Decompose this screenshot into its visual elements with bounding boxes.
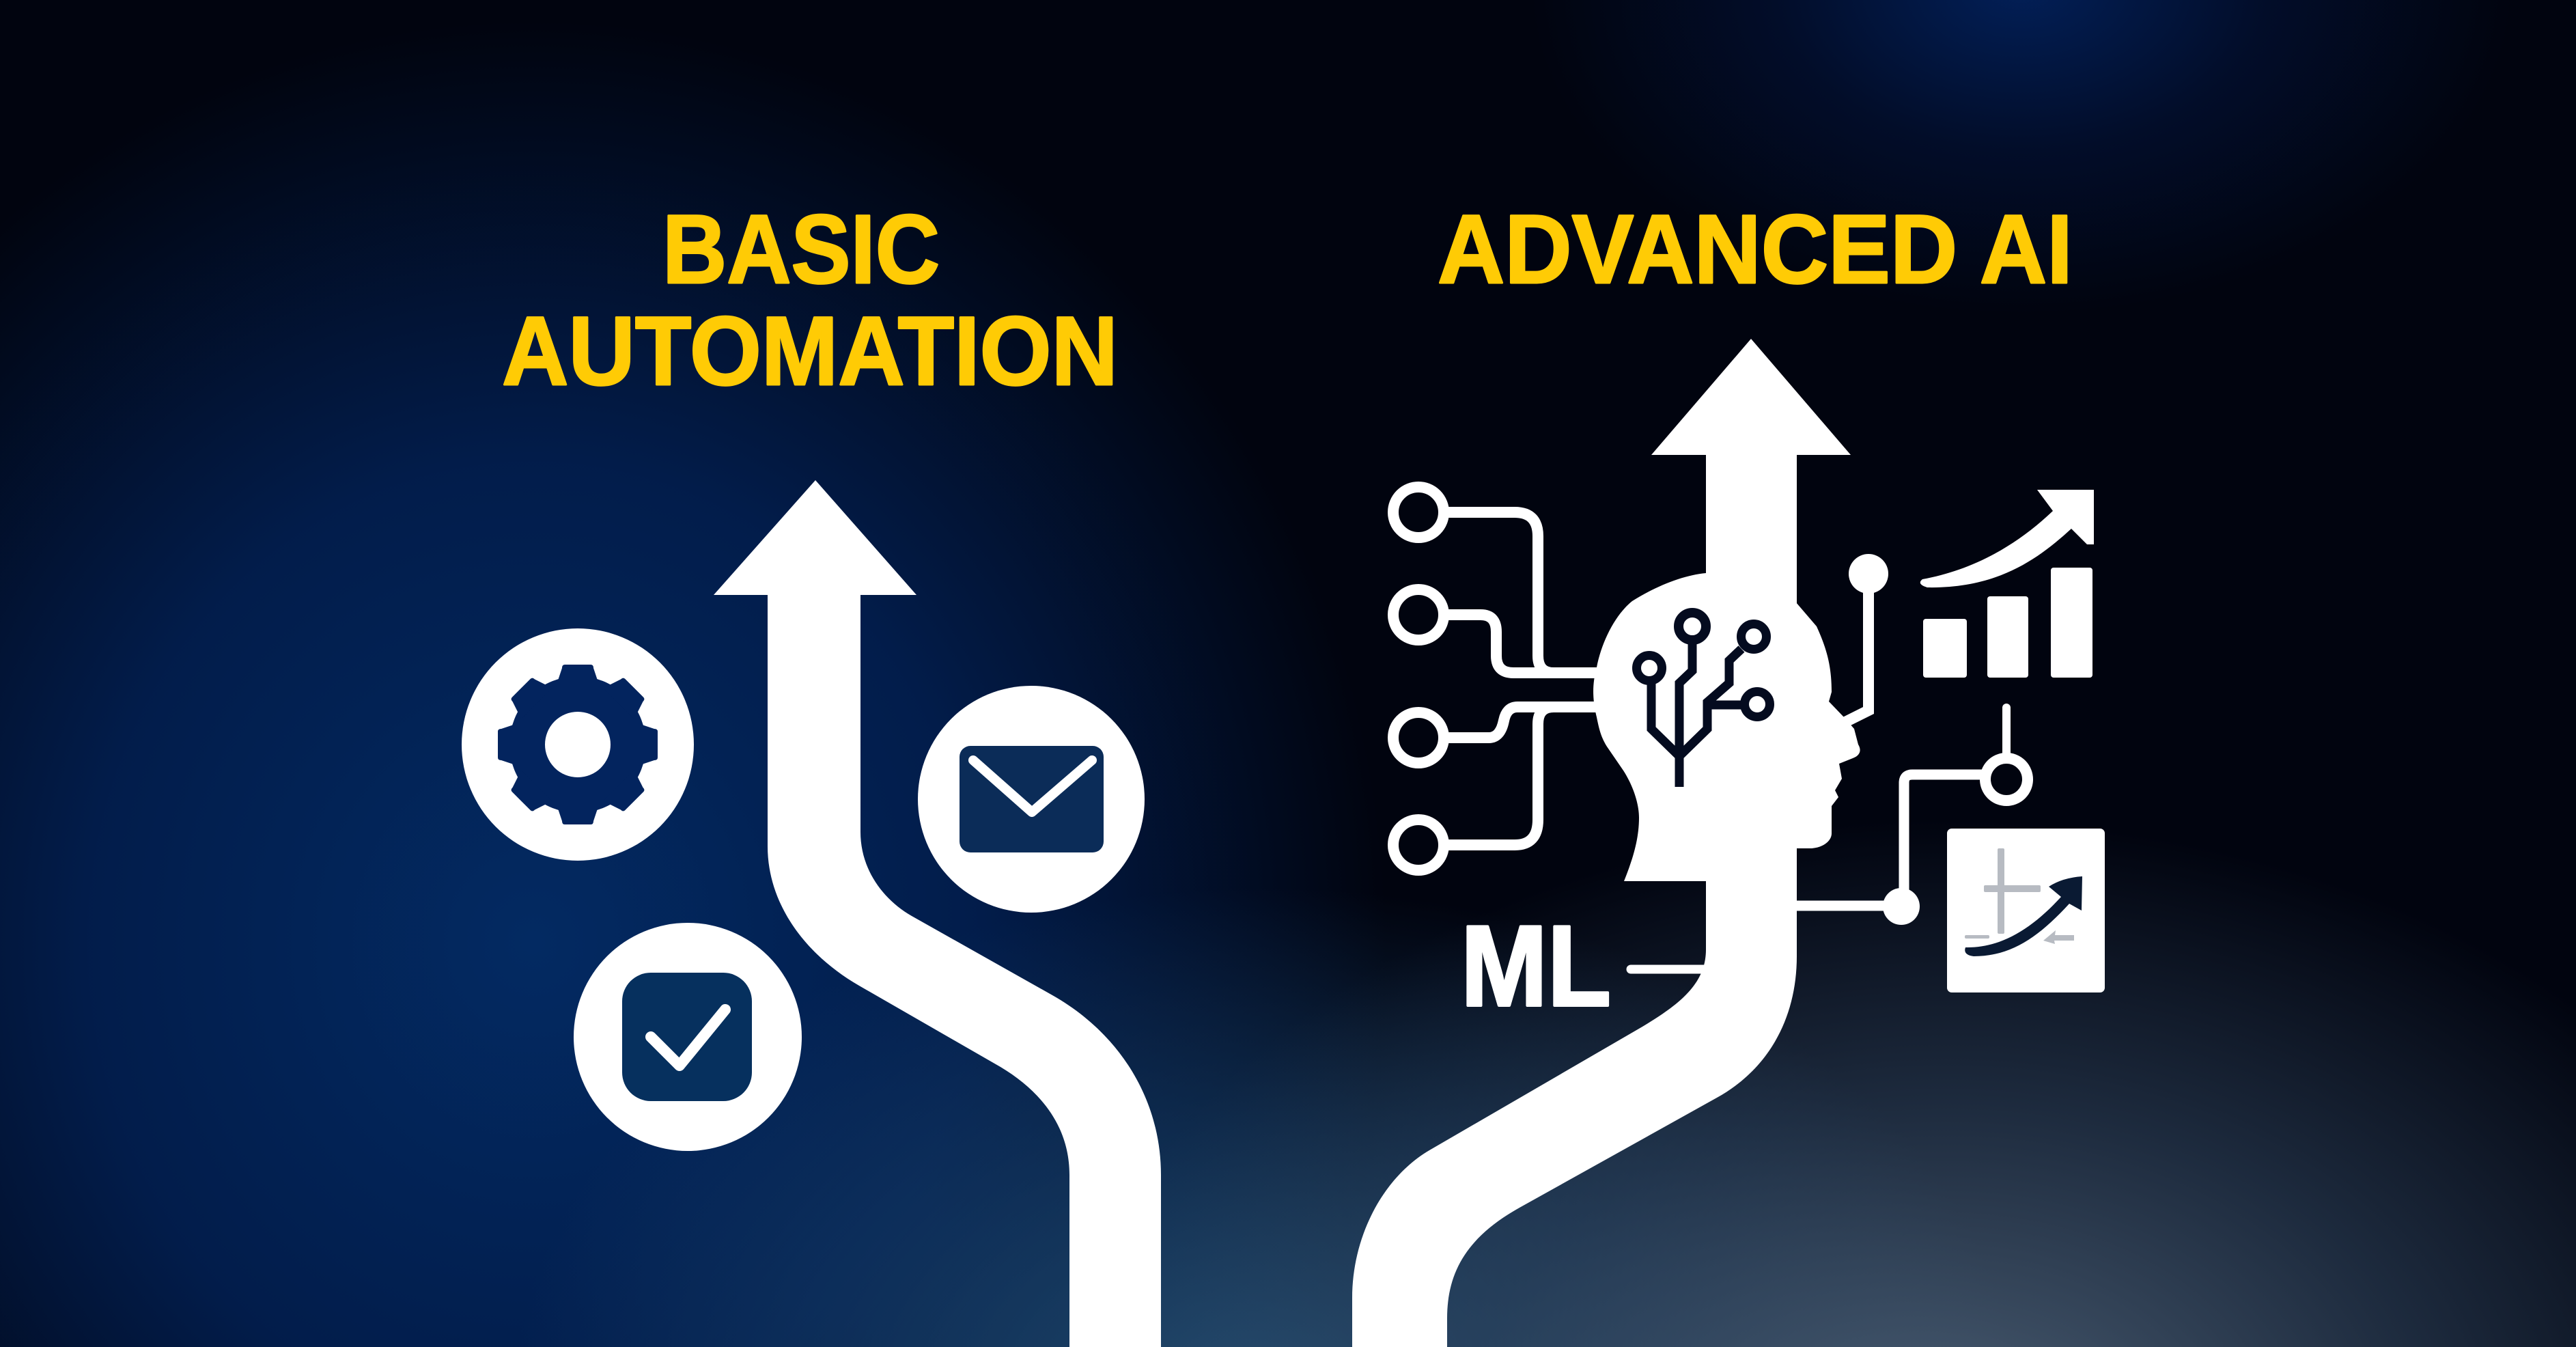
icon: card with growth arrow bbox=[1947, 829, 2105, 992]
icon: head silhouette bbox=[1593, 573, 1860, 888]
arrow: advanced AI path bbox=[1352, 339, 1851, 1347]
label: ML: ML bbox=[1461, 902, 1611, 1030]
heading: advanced AI: ADVANCED AI bbox=[1438, 195, 2073, 304]
left circuit connectors bbox=[1393, 487, 1601, 870]
heading: basic automation: BASIC bbox=[662, 195, 940, 304]
arrow: basic automation path bbox=[714, 480, 1161, 1347]
heading: basic automation bbox=[502, 195, 1118, 406]
connector: arrow shaft to circle node bbox=[1797, 708, 2028, 925]
icon: gear in circle bbox=[462, 628, 694, 861]
heading: basic automation: AUTOMATION bbox=[502, 297, 1118, 406]
icon: rising bar chart bbox=[1920, 490, 2094, 678]
connector: head to ball node bbox=[1844, 554, 1888, 723]
icon: circuit tree inside head bbox=[1636, 613, 1770, 787]
icon: checkmark in circle bbox=[574, 923, 802, 1151]
icon: envelope in circle bbox=[918, 686, 1145, 913]
